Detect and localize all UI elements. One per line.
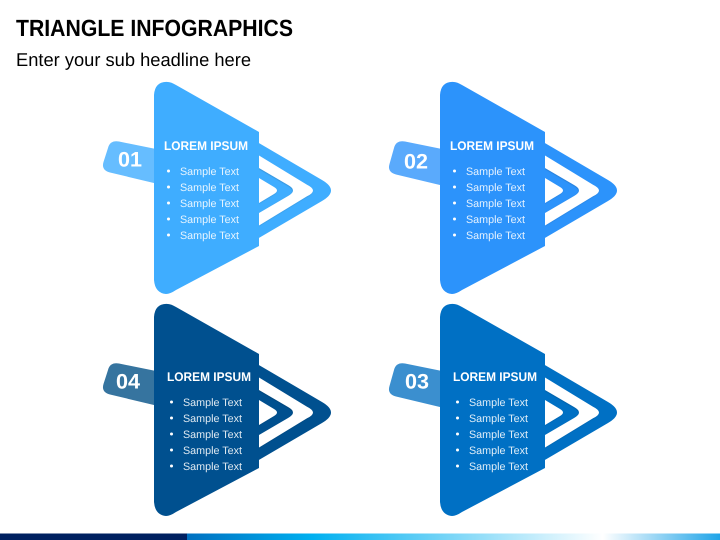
title: TRIANGLE INFOGRAPHICS	[16, 15, 293, 41]
number tab 02	[389, 141, 442, 186]
number tab 01: 01	[118, 148, 142, 172]
sub headline: Enter your sub headline here	[16, 49, 251, 70]
number tab 03	[389, 363, 442, 408]
bullet list: Sample Text	[469, 461, 528, 473]
bullet list: Sample Text	[466, 166, 525, 178]
number tab 04	[103, 363, 156, 406]
bullet list: Sample Text	[469, 429, 528, 441]
bullet list: Sample Text	[183, 413, 242, 425]
footer band	[0, 534, 720, 540]
heading: LOREM IPSUM	[450, 139, 534, 153]
bullet list: Sample Text	[183, 445, 242, 457]
number tab 01	[103, 141, 156, 184]
triangle arrow with chevrons	[440, 304, 617, 516]
panel: 02	[389, 82, 617, 294]
heading: LOREM IPSUM	[167, 370, 251, 384]
bullet list	[456, 397, 528, 473]
bullet list: Sample Text	[180, 198, 239, 210]
number tab 02: 02	[404, 150, 428, 174]
bullet list: Sample Text	[469, 445, 528, 457]
bullet list	[170, 397, 242, 473]
heading: LOREM IPSUM	[164, 139, 248, 153]
bullet list: Sample Text	[183, 429, 242, 441]
bullet list: Sample Text	[469, 397, 528, 409]
bullet list: Sample Text	[466, 214, 525, 226]
bullet list: Sample Text	[466, 230, 525, 242]
panel: 01	[103, 82, 331, 294]
bullet list: Sample Text	[469, 413, 528, 425]
bullet list: Sample Text	[180, 166, 239, 178]
heading: LOREM IPSUM	[453, 370, 537, 384]
number tab 04: 04	[116, 370, 140, 394]
bullet list: Sample Text	[183, 461, 242, 473]
triangle arrow with chevrons	[154, 82, 331, 294]
bullet list	[453, 166, 525, 242]
panel: 04	[103, 304, 331, 516]
triangle arrow with chevrons	[154, 304, 331, 516]
triangle arrow with chevrons	[440, 82, 617, 294]
bullet list	[167, 166, 239, 242]
number tab 03: 03	[405, 370, 429, 394]
bullet list: Sample Text	[180, 230, 239, 242]
bullet list: Sample Text	[466, 198, 525, 210]
panel: 03	[389, 304, 617, 516]
bullet list: Sample Text	[183, 397, 242, 409]
bullet list: Sample Text	[466, 182, 525, 194]
bullet list: Sample Text	[180, 214, 239, 226]
bullet list: Sample Text	[180, 182, 239, 194]
